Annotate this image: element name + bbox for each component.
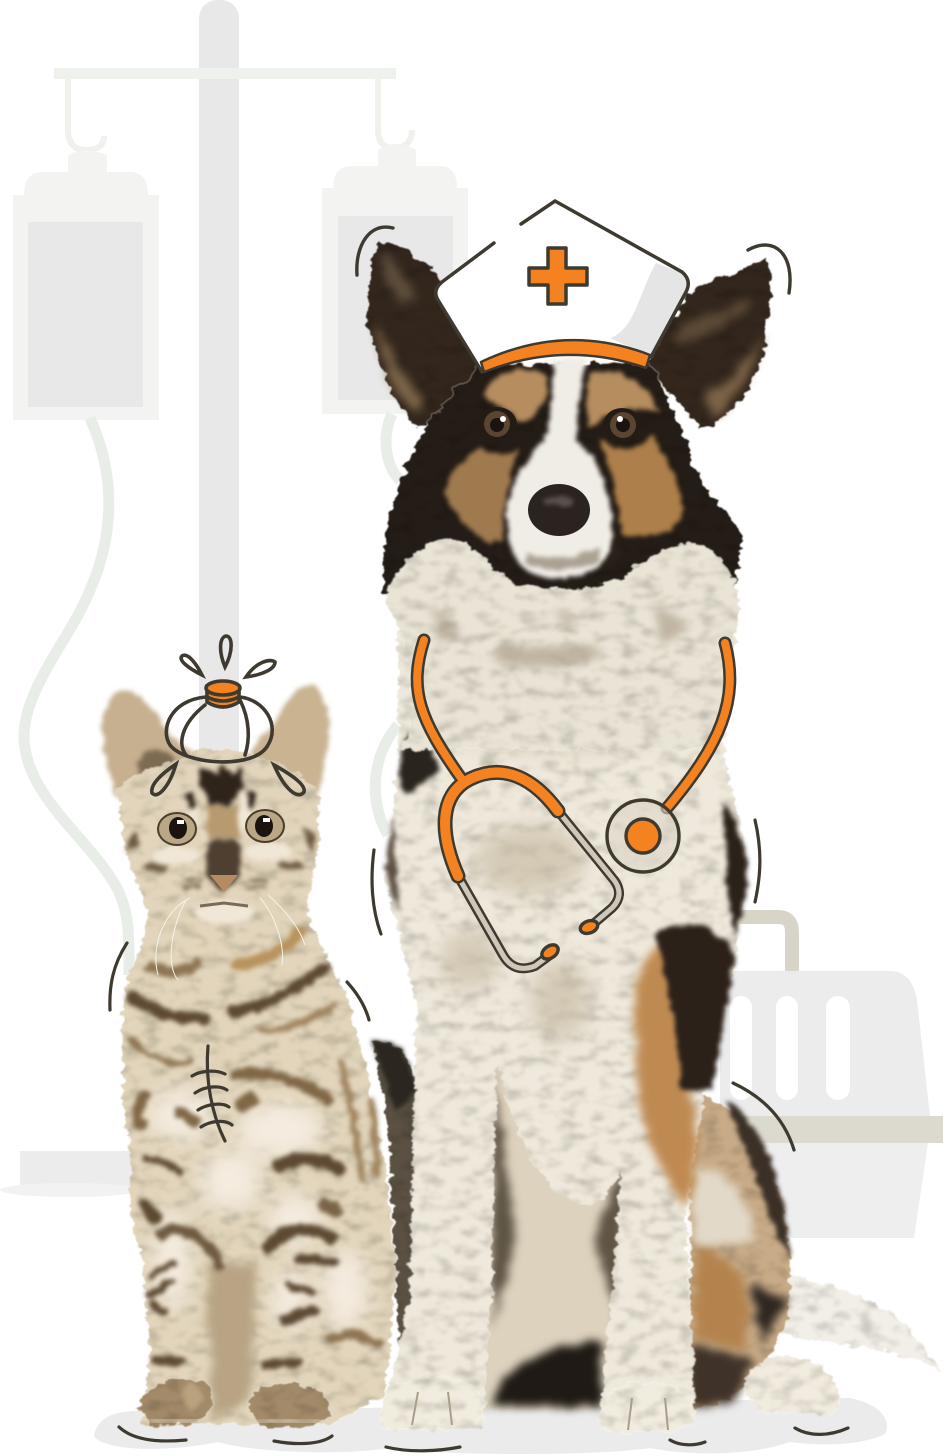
cat mouth [200, 903, 248, 906]
dog right eye [603, 408, 641, 442]
dog body [378, 575, 748, 1430]
dog [366, 238, 942, 1432]
ruff shadows [430, 600, 690, 669]
dog paws [381, 1377, 697, 1432]
right IV bag [322, 144, 468, 414]
pole base [20, 1151, 150, 1190]
dog nose [528, 484, 590, 536]
left IV bag [13, 150, 159, 420]
dog left eye [477, 407, 517, 441]
motion lines around animals [110, 820, 848, 1451]
ear tips [539, 918, 600, 962]
belly dark folds [492, 1060, 625, 1330]
orange tubing [417, 640, 730, 876]
dog head dark fur [382, 362, 742, 600]
paw toes [412, 1392, 668, 1430]
dog hind paw [745, 1357, 841, 1414]
cat forehead markings [187, 763, 255, 810]
dog left ear [366, 238, 490, 425]
pet carrier [720, 917, 943, 1238]
IV pole [199, 0, 239, 800]
cat nose tip [210, 875, 238, 892]
dog foreleg markings [636, 925, 735, 1210]
dog chest shading [440, 710, 670, 1040]
dog back left fur [372, 1041, 430, 1370]
left hook [68, 78, 104, 150]
cat lighter chest patches [148, 1090, 367, 1330]
inner bag line [182, 700, 248, 755]
dog tan right brow [587, 371, 660, 428]
carrier body [720, 971, 930, 1116]
bottle cap [206, 681, 240, 707]
dog white blaze and muzzle [507, 358, 613, 578]
dog haunch [690, 1095, 790, 1410]
dog tan left brow [483, 370, 548, 423]
cat face spots [125, 825, 316, 887]
drops [221, 636, 231, 667]
cat right eye [245, 809, 285, 843]
cat left eye [157, 812, 197, 846]
dog muzzle side shadows [495, 535, 622, 575]
cat left ear [102, 690, 197, 810]
cat face light areas [152, 790, 292, 924]
dog left shoulder patch [400, 730, 440, 795]
dog neck ruff [385, 539, 740, 750]
right hook [378, 78, 412, 148]
cat paws [137, 1378, 331, 1428]
carrier band [720, 1116, 943, 1143]
cat right ear [250, 685, 328, 810]
dog tan right cheek [600, 435, 683, 537]
chestpiece [607, 800, 679, 872]
crossbar [54, 68, 396, 79]
bottle on cat head [152, 636, 304, 795]
hat shade [610, 263, 688, 357]
cat whiskers [156, 895, 305, 980]
carrier windows [730, 996, 850, 1100]
cat stripes [130, 932, 378, 1365]
cat nose bridge [205, 839, 241, 893]
cat stitches [192, 1046, 232, 1141]
grey tubing [458, 811, 619, 968]
cat body and head [118, 749, 397, 1425]
ice bag outline [166, 697, 272, 762]
carrier handle [730, 917, 792, 975]
stethoscope [417, 640, 730, 968]
motion lines around ears [357, 227, 790, 293]
right IV tube [375, 414, 400, 835]
dog tan left cheek [445, 448, 520, 545]
dog right ear [645, 258, 771, 428]
dog mouth shade [525, 548, 600, 569]
hat cross [529, 248, 587, 304]
ground shadow [94, 1398, 887, 1454]
dog tail [775, 1268, 942, 1372]
dog belly [478, 1040, 640, 1410]
dog back left dark top [372, 1040, 418, 1110]
left IV tube [24, 418, 129, 975]
cat nose stripe tan [207, 805, 240, 840]
dog left side dark [385, 815, 400, 915]
pole floor shadow [0, 1183, 140, 1197]
cat [102, 685, 397, 1428]
carrier base [720, 1143, 928, 1238]
nurse hat [436, 201, 688, 372]
hat band [481, 340, 650, 372]
hat outline [436, 201, 688, 372]
dog dark underside [492, 1340, 603, 1408]
background: IV stand [13, 0, 468, 1190]
cat gap between legs [207, 1265, 257, 1418]
left ear inner shade [135, 749, 175, 790]
dog right side patch [722, 802, 747, 935]
